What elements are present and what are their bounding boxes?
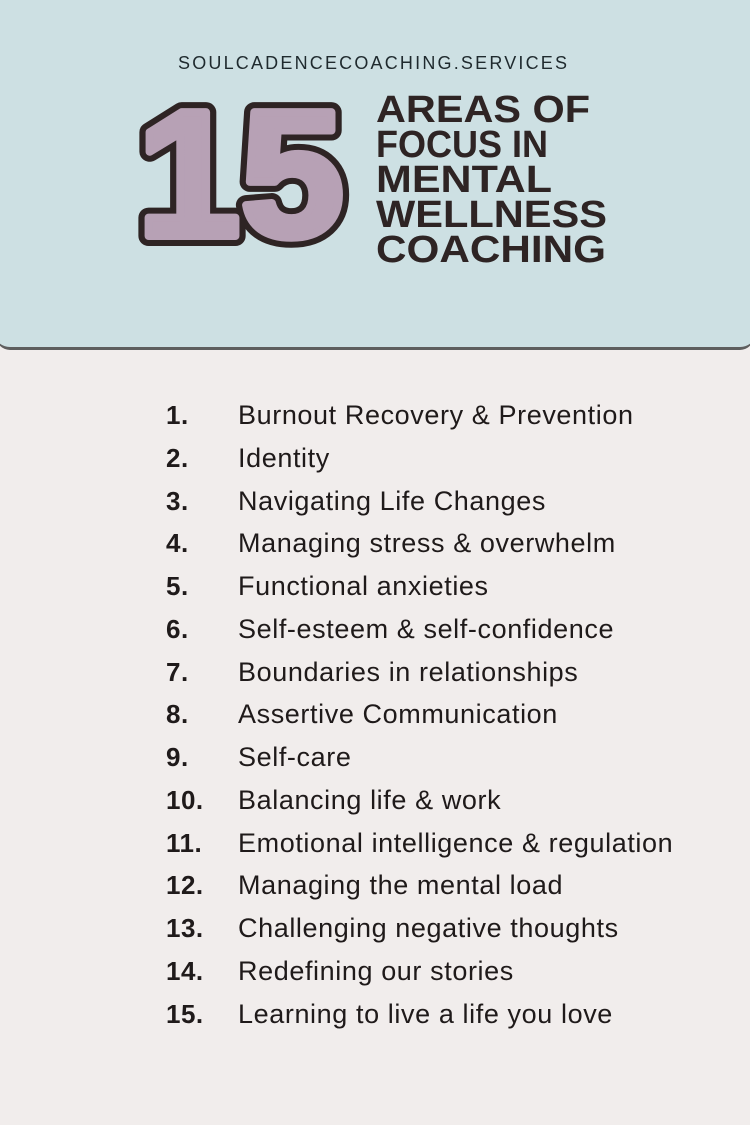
numbered list: 3. (166, 486, 189, 516)
numbered list: Challenging negative thoughts (238, 913, 619, 943)
title (376, 89, 607, 271)
numbered list: 2. (166, 443, 189, 473)
numbered list: 1. (166, 400, 189, 430)
title: AREAS OF (376, 89, 590, 131)
numbered list: Balancing life & work (238, 785, 501, 815)
numbered list: Managing stress & overwhelm (238, 528, 616, 558)
numbered list: Self-care (238, 742, 351, 772)
numbered list: 4. (166, 528, 189, 558)
website url: SOULCADENCECOACHING.SERVICES (178, 53, 567, 73)
title: WELLNESS (376, 194, 607, 236)
big number 15: 15 (137, 74, 344, 275)
numbered list: 12. (166, 870, 204, 900)
header graphic (137, 53, 607, 275)
numbered list: 13. (166, 913, 204, 943)
numbered list: 11. (166, 828, 202, 858)
numbered list: Managing the mental load (238, 870, 563, 900)
numbered list: 7. (166, 657, 189, 687)
numbered list: Identity (238, 443, 330, 473)
numbered list: 5. (166, 571, 189, 601)
numbered list: Assertive Communication (238, 699, 558, 729)
numbered list: Burnout Recovery & Prevention (238, 400, 634, 430)
numbered list: 6. (166, 614, 189, 644)
title: COACHING (376, 229, 606, 271)
numbered list: Self-esteem & self-confidence (238, 614, 614, 644)
numbered list: Emotional intelligence & regulation (238, 828, 673, 858)
numbered list: Boundaries in relationships (238, 657, 578, 687)
numbered list: Learning to live a life you love (238, 999, 613, 1029)
numbered list: Functional anxieties (238, 571, 489, 601)
numbered list: Redefining our stories (238, 956, 514, 986)
header panel (0, 0, 750, 350)
title: MENTAL (376, 159, 552, 201)
numbered list: 8. (166, 699, 189, 729)
numbered list: 9. (166, 742, 189, 772)
numbered list: Navigating Life Changes (238, 486, 546, 516)
numbered list: 14. (166, 956, 204, 986)
numbered list: 10. (166, 785, 204, 815)
title: FOCUS IN (376, 124, 548, 166)
big number 15: 15 (137, 74, 344, 275)
numbered list: 15. (166, 999, 204, 1029)
